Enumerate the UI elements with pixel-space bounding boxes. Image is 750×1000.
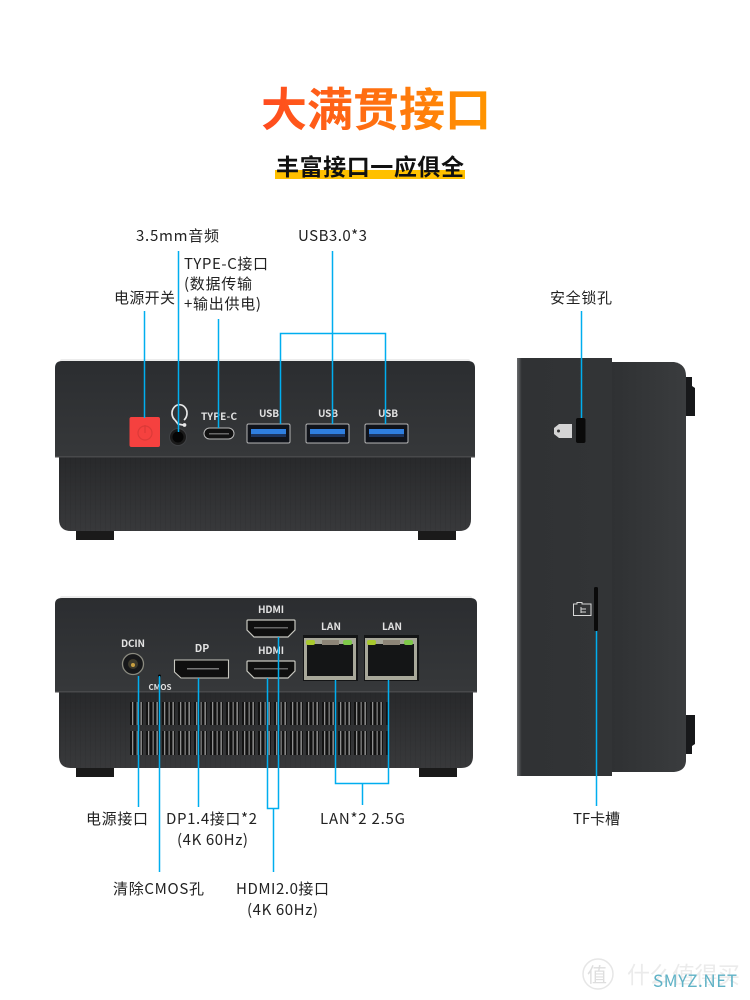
label: LAN 2: LAN: [382, 618, 402, 633]
label: security lock: 安全锁孔: [550, 287, 612, 308]
port: USB 3: [365, 424, 408, 443]
port: USB 2: [306, 424, 349, 443]
label: clear CMOS: 清除CMOS孔: [113, 878, 204, 899]
TF card slot: [594, 587, 598, 631]
icon: lock: [554, 424, 572, 438]
foot left: [76, 768, 114, 777]
label: DP description: (4K 60Hz): [177, 829, 248, 850]
lock slot: [576, 418, 586, 443]
label: LAN 1: LAN: [321, 618, 341, 633]
title: 大满贯接口: [261, 74, 491, 140]
callout lines: rear view: [138, 637, 388, 872]
foot left: [76, 531, 114, 540]
label: DP description: DP1.4接口*2: [166, 808, 257, 829]
rear tab top: [685, 377, 695, 416]
watermark: 什么值得买: [627, 956, 740, 990]
label: HDMI lower: HDMI: [258, 642, 284, 657]
icon: TF card: [574, 602, 591, 616]
label: USB 1: USB: [259, 405, 279, 420]
panel: rear view of mini PC: [55, 596, 477, 777]
label: TF slot: TF卡槽: [573, 808, 620, 829]
callout lines: side view: [582, 311, 596, 806]
CMOS hole: [158, 674, 161, 678]
watermark: SMYZ.NET: [653, 967, 737, 992]
label: Type-C description: TYPE-C接口: [184, 253, 268, 274]
port: HDMI lower: [247, 661, 295, 678]
panel: front view of mini PC: [55, 359, 475, 540]
label: CMOS: CMOS: [148, 682, 172, 693]
label: HDMI description: (4K 60Hz): [247, 899, 318, 920]
watermark: 值: [587, 959, 607, 988]
label: USB 2: USB: [318, 405, 338, 420]
label: Type-C description: (数据传输: [184, 273, 252, 294]
label: HDMI upper: HDMI: [258, 601, 284, 616]
rear tab bottom: [685, 715, 695, 754]
label: power port: 电源接口: [86, 808, 148, 829]
foot right: [419, 768, 457, 777]
audio jack: [170, 428, 186, 446]
label: Type-C description: +输出供电): [184, 293, 261, 314]
panel: side view of mini PC: [517, 358, 695, 776]
label: USB 3: USB: [378, 405, 398, 420]
port: LAN 1: [303, 635, 358, 681]
label: HDMI description: HDMI2.0接口: [236, 878, 329, 899]
label: DCIN: DCIN: [121, 635, 145, 650]
label: power switch: 电源开关: [114, 287, 175, 308]
port: USB 1: [247, 424, 290, 443]
port: HDMI upper: [247, 620, 295, 637]
power button: [130, 417, 160, 447]
subtitle with yellow highlight: 丰富接口一应俱全: [276, 148, 464, 182]
label: USB3.0: USB3.0*3: [298, 225, 367, 246]
vents: [130, 702, 389, 755]
label: HDMI description: [236, 878, 329, 920]
label: LAN description: LAN*2 2.5G: [320, 808, 405, 829]
icon: headphones: [172, 405, 187, 426]
label: DP: DP: [195, 641, 209, 656]
label: TYPE-C: TYPE-C: [201, 408, 237, 423]
port: DC in: [122, 654, 144, 674]
label: DP description: [166, 808, 257, 850]
port: LAN 2: [364, 635, 419, 681]
watermark: [583, 956, 740, 992]
callout lines: front view: [144, 251, 386, 432]
label: 3.5mm audio: 3.5mm音频: [136, 225, 219, 246]
foot right: [418, 531, 456, 540]
label: Type-C description: [184, 253, 268, 314]
port: DP: [174, 660, 228, 678]
port: Type-C: [204, 428, 234, 439]
